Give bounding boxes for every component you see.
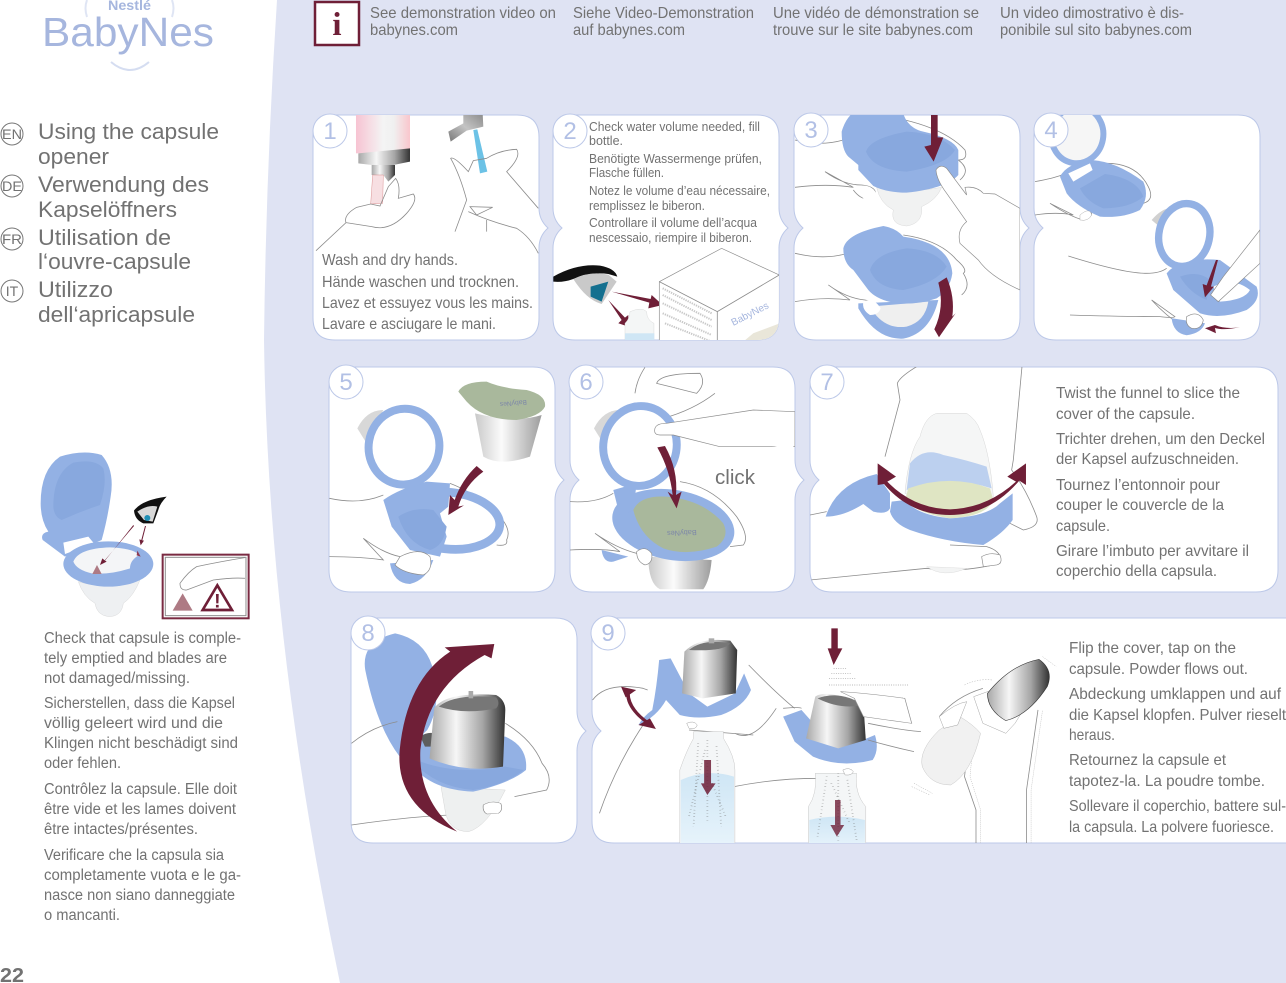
check text: completamente vuota e le ga- [44, 867, 241, 884]
demonstration video notes: babynes.com [370, 22, 458, 39]
check text: o mancanti. [44, 907, 120, 924]
panel: step 5 insert capsule [329, 365, 564, 592]
step 7 text: couper le couvercle de la [1056, 497, 1224, 514]
check text: oder fehlen. [44, 755, 121, 772]
illustration: flipping opener over [351, 633, 549, 832]
step 1 text: Hände waschen und trocknen. [322, 274, 519, 291]
step number 8: 8 [361, 620, 375, 647]
step 2 text: remplissez le biberon. [589, 199, 705, 213]
illustration: twisting funnel [810, 367, 1037, 580]
demonstration video notes: trouve sur le site babynes.com [773, 22, 973, 39]
illustration: tapping capsule over bottles and shaking [593, 628, 1056, 847]
step 1 text [322, 252, 533, 333]
step 9 text: Flip the cover, tap on the [1069, 640, 1236, 657]
step number 1 [313, 114, 347, 148]
step number 7: 7 [820, 369, 834, 396]
step number 5 [329, 365, 363, 399]
check text: Verificare che la capsula sia [44, 847, 224, 864]
click label: click [715, 467, 756, 489]
step number 4: 4 [1044, 117, 1058, 144]
step number 8 [351, 616, 385, 650]
panel: step 6 close lid [569, 365, 804, 592]
panel: step 1 wash hands [313, 113, 548, 340]
heading EN [38, 119, 219, 169]
step 7 text [1056, 385, 1265, 580]
heading DE: Verwendung des [38, 172, 209, 197]
step 9 text: tapotez-la. La poudre tombe. [1069, 773, 1265, 790]
demonstration video notes: ponibile sul sito babynes.com [1000, 22, 1192, 39]
check text: völlig geleert wird und die [44, 715, 223, 732]
step 9 text: capsule. Powder flows out. [1069, 661, 1248, 678]
check text: tely emptied and blades are [44, 650, 227, 667]
white left column [0, 0, 340, 983]
demonstration video notes: See demonstration video on [370, 5, 556, 22]
demonstration video notes: Siehe Video-Demonstration [573, 5, 754, 22]
step 7 text: Twist the funnel to slice the [1056, 385, 1240, 402]
info icon: i [332, 7, 342, 43]
check text: être vide et les lames doivent [44, 801, 237, 818]
illustration: pressing and twisting opener [795, 114, 1020, 339]
language badge FR: FR [2, 231, 22, 247]
heading IT: Utilizzo [38, 277, 113, 302]
check text: Contrôlez la capsule. Elle doit [44, 781, 238, 798]
heading DE [38, 172, 209, 222]
step number 4 [1034, 113, 1068, 147]
demonstration video notes: Un video dimostrativo è dis- [1000, 5, 1184, 22]
panel: step 7 twist the funnel [810, 365, 1278, 592]
icon: eye [134, 497, 167, 523]
panel: step 3 open the lid [794, 113, 1029, 340]
check text: Check that capsule is comple- [44, 630, 241, 647]
language badge EN [1, 123, 23, 145]
step 1 text: Wash and dry hands. [322, 252, 458, 269]
step 2 text: Flasche füllen. [589, 166, 664, 180]
step 1 text: Lavez et essuyez vous les mains. [322, 295, 533, 312]
step 9 text [1069, 640, 1286, 836]
step number 6 [569, 365, 603, 399]
step 2 text: nescessaio, riempire il biberon. [589, 231, 752, 245]
heading FR: l‘ouvre-capsule [38, 249, 191, 274]
step number 7 [810, 365, 844, 399]
illustration: capsule and opener [329, 382, 545, 584]
step number 2: 2 [563, 118, 577, 145]
step 2 text: Notez le volume d’eau nécessaire, [589, 184, 770, 198]
step number 5: 5 [339, 369, 353, 396]
illustration: capsule and opener: BabyNes [499, 398, 527, 407]
language badge FR [1, 228, 23, 250]
warning box: do not touch blades [163, 555, 249, 618]
illustration: opener lifted open [1035, 103, 1260, 335]
step 7 text: Trichter drehen, um den Deckel [1056, 431, 1265, 448]
step number 1: 1 [323, 118, 337, 145]
language badge IT [1, 280, 23, 302]
step 2 text: Check water volume needed, fill [589, 120, 760, 134]
step 7 text: coperchio della capsula. [1056, 563, 1217, 580]
panel: step 8 flip opener [351, 616, 586, 843]
step number 6: 6 [579, 369, 593, 396]
step number 3: 3 [804, 117, 818, 144]
step 7 text: capsule. [1056, 518, 1110, 535]
illustration: capsule in opener with finger: BabyNes [667, 528, 697, 538]
step 2 text: Benötigte Wassermenge prüfen, [589, 152, 762, 166]
step 9 text: Retournez la capsule et [1069, 752, 1227, 769]
step 9 text: heraus. [1069, 727, 1115, 744]
logo: BabyNes [42, 0, 214, 70]
check text: être intactes/présentes. [44, 821, 198, 838]
heading EN: opener [38, 144, 109, 169]
language badge DE: DE [2, 178, 22, 194]
language badge IT: IT [6, 283, 19, 299]
step 2 text: bottle. [589, 134, 623, 148]
step 7 text: cover of the capsule. [1056, 406, 1195, 423]
illustration: opener inspection with eye [41, 453, 249, 618]
demonstration video notes: Une vidéo de démonstration se [773, 5, 979, 22]
step 7 text: der Kapsel aufzuschneiden. [1056, 451, 1239, 468]
step number 3 [794, 113, 828, 147]
check text: Sicherstellen, dass die Kapsel [44, 695, 235, 712]
warning box: do not touch blades: ! [214, 591, 221, 612]
check text: nasce non siano danneggiate [44, 887, 235, 904]
demonstration video notes [370, 5, 1192, 39]
illustration: soap and tap [316, 113, 538, 253]
step 7 text: Girare l’imbuto per avvitare il [1056, 543, 1249, 560]
check text: Klingen nicht beschädigt sind [44, 735, 238, 752]
step 1 text: Lavare e asciugare le mani. [322, 316, 496, 333]
panel: step 4 open opener [1034, 103, 1260, 340]
title block in four languages [1, 119, 219, 327]
panel: step 2 check water volume [553, 114, 788, 342]
language badge EN: EN [2, 126, 22, 142]
step 2 text: Controllare il volume dell’acqua [589, 216, 757, 230]
heading DE: Kapselöffners [38, 197, 177, 222]
step 9 text: Abdeckung umklappen und auf [1069, 686, 1282, 703]
heading IT [38, 277, 195, 327]
language badge DE [1, 175, 23, 197]
panel: step 9 tap capsule powder flows [591, 616, 1286, 847]
illustration: eye, bottle and box: BabyNes [730, 300, 771, 329]
check text: not damaged/missing. [44, 670, 190, 687]
step number 9: 9 [601, 620, 615, 647]
heading FR: Utilisation de [38, 225, 171, 250]
info icon [315, 2, 359, 45]
illustration: eye, bottle and box [553, 248, 780, 342]
logo: BabyNes: BabyNes [42, 9, 214, 55]
illustration: capsule in opener with finger [570, 367, 795, 589]
check text [44, 630, 241, 924]
step 2 text [589, 120, 770, 245]
step number 2 [553, 114, 587, 148]
heading FR [38, 225, 191, 274]
demonstration video notes: auf babynes.com [573, 22, 685, 39]
heading IT: dell‘apricapsule [38, 302, 195, 327]
step 7 text: Tournez l’entonnoir pour [1056, 477, 1221, 494]
heading EN: Using the capsule [38, 119, 219, 144]
arrows [100, 525, 146, 565]
step number 9 [591, 616, 625, 650]
